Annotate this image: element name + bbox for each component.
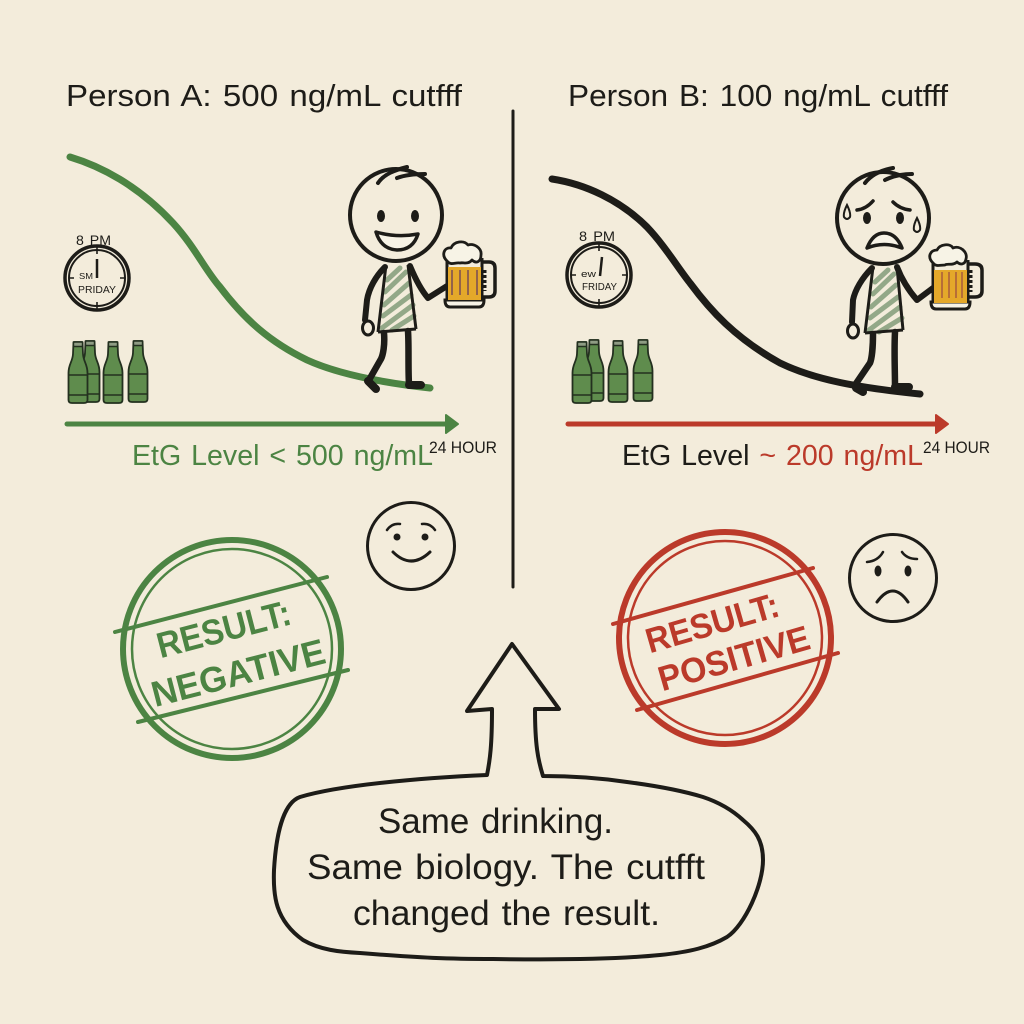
panel: Person B timeline <box>552 168 990 472</box>
callout text: Same drinking. <box>378 802 613 841</box>
label: EtG level about 200: EtG Level ~ 200 ng/mL <box>622 440 923 472</box>
icon: clock 8 PM Friday: ew <box>581 269 597 279</box>
stamp: result negative: NEGATIVE <box>147 631 329 715</box>
callout: speech bubble with upward arrow <box>274 644 763 959</box>
callout text: changed the result. <box>353 894 660 933</box>
stamp: result positive: POSITIVE <box>654 619 814 699</box>
arrow: 24 hour timeline (red) <box>568 415 948 433</box>
icon: clock 8 PM Friday: 8 PM <box>76 232 111 248</box>
stamp: result negative: RESULT: <box>152 592 295 666</box>
label: 24 hour: 24 HOUR <box>429 438 497 457</box>
icon: beer mug <box>444 242 495 307</box>
chart: green EtG decay curve <box>70 157 430 388</box>
heading: Person A: Person A: 500 ng/mL cutfff <box>66 78 462 113</box>
stamp: result positive <box>613 532 838 744</box>
label: 24 hour: 24 HOUR <box>923 438 990 457</box>
panel: Person A timeline <box>65 157 497 472</box>
icon: four beer bottles <box>572 340 652 403</box>
icon: beer mug <box>930 245 982 309</box>
icon: four beer bottles <box>68 341 148 403</box>
stick figure: worried person with beer <box>837 168 982 392</box>
label: EtG level below 500: EtG Level < 500 ng/mL <box>132 440 433 472</box>
icon: clock 8 PM Friday <box>65 232 129 310</box>
icon: clock 8 PM Friday <box>567 228 631 307</box>
chart: black EtG decay curve <box>552 179 920 394</box>
icon: clock 8 PM Friday: PRIDAY <box>78 285 116 296</box>
callout text <box>307 802 705 933</box>
arrow: 24 hour timeline (green) <box>67 415 458 433</box>
icon: clock 8 PM Friday: 8 PM <box>579 228 615 244</box>
stamp: result positive: RESULT: <box>641 586 784 661</box>
icon: smiling face <box>368 502 454 590</box>
icon: clock 8 PM Friday: SM <box>79 271 93 281</box>
callout text: Same biology. The cutfft <box>307 848 705 887</box>
heading: Person B: Person B: 100 ng/mL cutfff <box>568 78 948 113</box>
stick figure: happy person with beer <box>350 167 495 389</box>
icon: worried face <box>850 534 936 622</box>
center divider <box>512 111 514 587</box>
stamp: result negative <box>115 540 348 758</box>
icon: clock 8 PM Friday: FRIDAY <box>582 282 617 293</box>
